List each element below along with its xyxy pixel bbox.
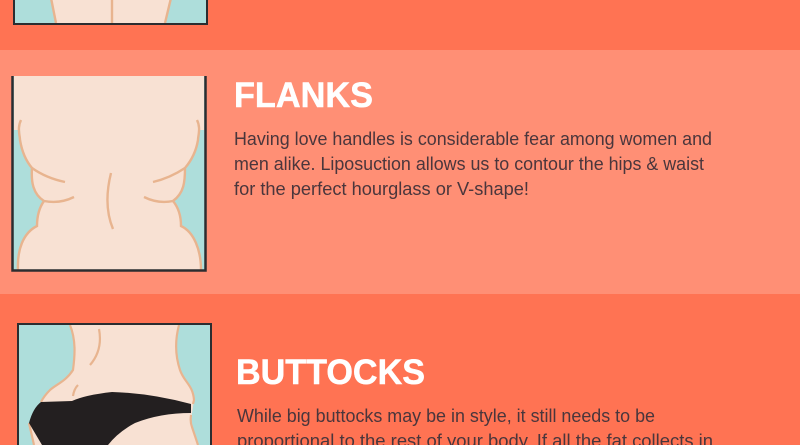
heading: buttocks: BUTTOCKS (236, 353, 425, 392)
text block: flanks description: men alike. Liposuction allows us to contour the hips & waist (234, 154, 704, 174)
icon: legs illustration (14, 0, 207, 24)
icon: buttocks illustration (18, 324, 211, 445)
panel: buttocks (0, 294, 800, 445)
panel: flanks (0, 50, 800, 294)
text block: flanks description: Having love handles is considerable fear among women and (234, 129, 712, 149)
panel: previous section remainder (0, 0, 800, 50)
text block: buttocks description: While big buttocks may be in style, it still needs to be (237, 406, 655, 426)
text block: flanks description (234, 129, 712, 199)
text block: flanks description: for the perfect hourglass or V-shape! (234, 179, 529, 199)
heading: flanks: FLANKS (234, 76, 373, 115)
icon: flanks illustration (12, 76, 206, 271)
text block: buttocks description (237, 406, 713, 445)
